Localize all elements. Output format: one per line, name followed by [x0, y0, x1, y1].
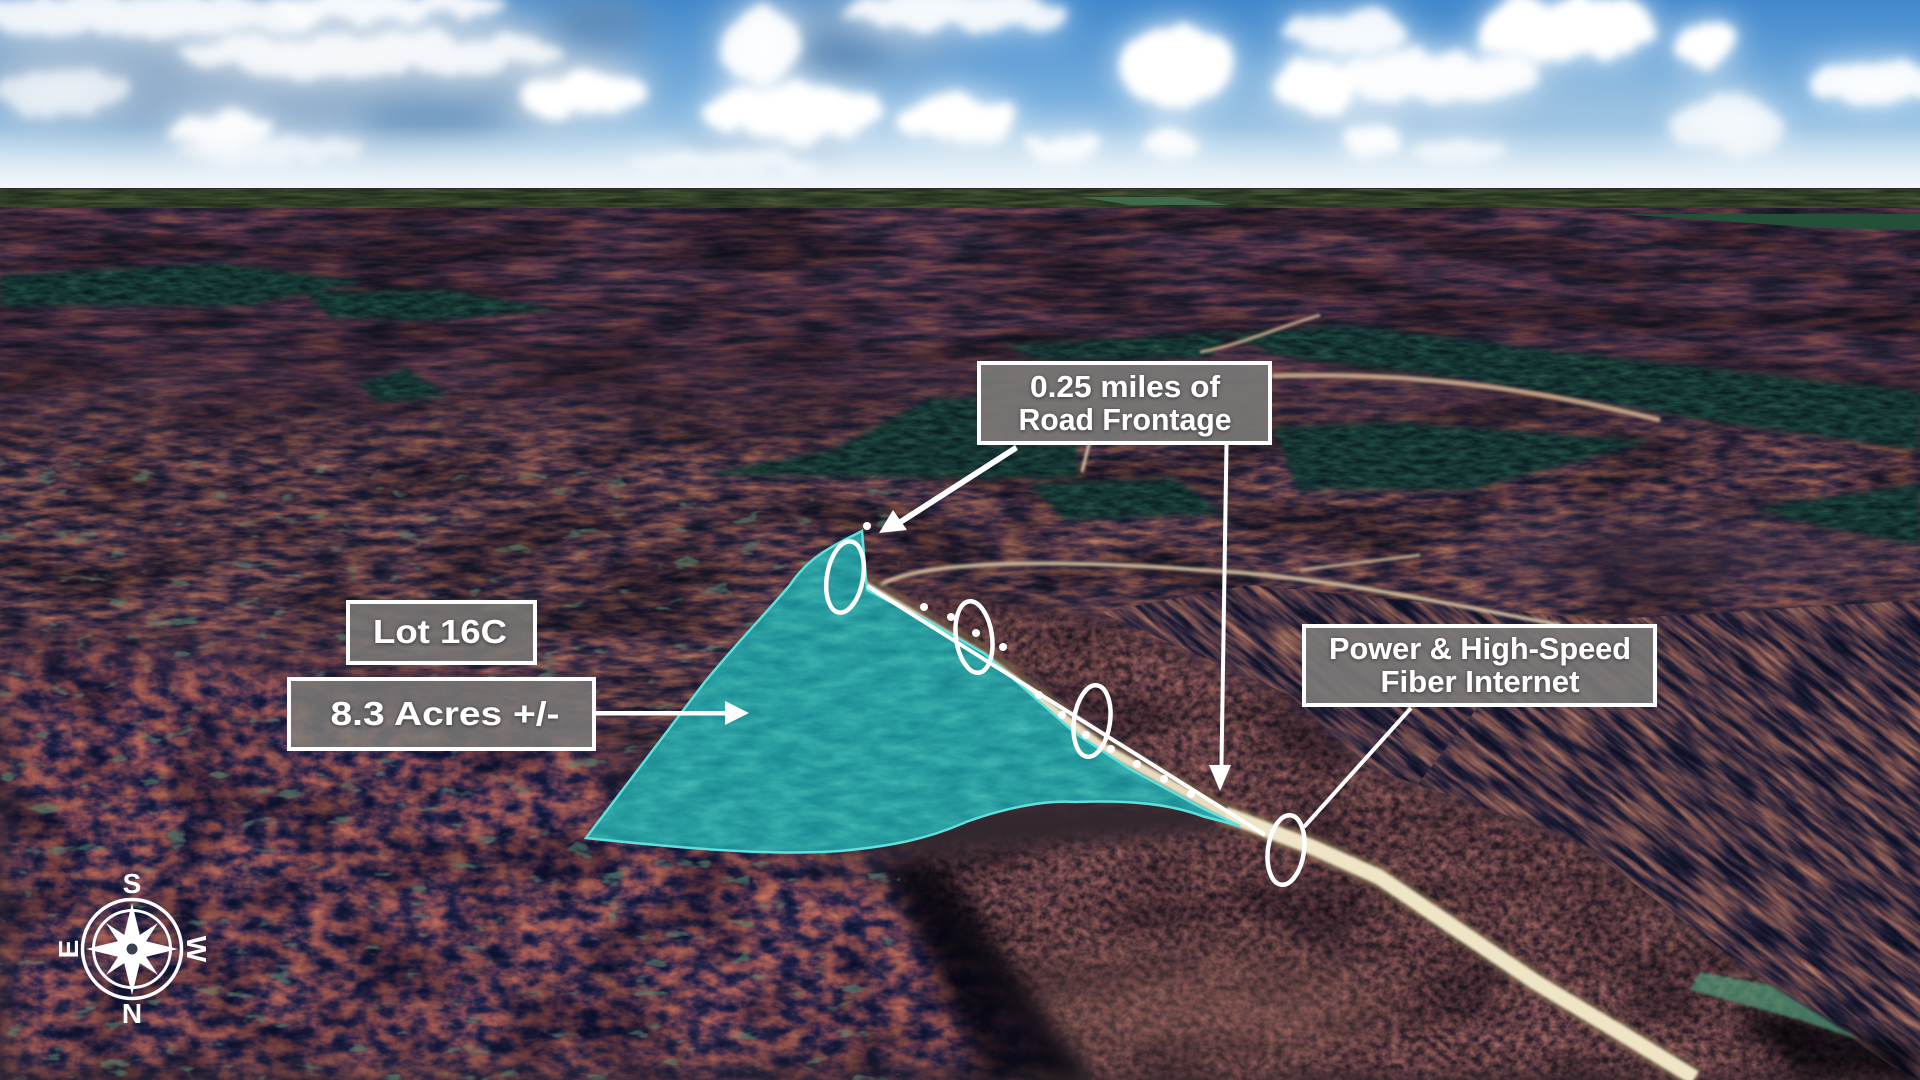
distant horizon tree line	[0, 189, 1920, 208]
power and fiber marker ellipses	[821, 538, 1309, 887]
icon: compass rose: W	[181, 936, 212, 963]
label: acreage	[289, 679, 594, 749]
dark green tree plantations	[0, 260, 1920, 560]
cloud shadows	[360, 0, 890, 157]
label: power and fiber: Power & High-Speed	[1329, 631, 1631, 666]
dirt roads	[863, 315, 1695, 1078]
label: power and fiber: Fiber Internet	[1380, 664, 1580, 699]
arrow: acreage to lot	[595, 701, 749, 725]
label: lot number: Lot 16C	[373, 613, 507, 650]
label: road frontage	[979, 363, 1270, 443]
label: road frontage: 0.25 miles of	[1030, 369, 1221, 404]
icon: compass rose: E	[53, 940, 84, 958]
label: power and fiber	[1304, 626, 1655, 705]
green foliage specks	[0, 460, 900, 1080]
arrow: road frontage to road	[1209, 445, 1231, 791]
icon: compass rose: S	[123, 868, 141, 899]
icon: compass rose: N	[122, 998, 142, 1029]
pointer line: power and fiber	[1304, 708, 1411, 827]
lot 16C teal parcel	[580, 525, 1260, 860]
background: sky with clouds	[0, 0, 1920, 195]
road frontage marker line and utility dots	[863, 522, 1265, 835]
label: lot number	[348, 602, 535, 663]
arrow: road frontage to lot top	[879, 445, 1018, 533]
grassy green clearing on the ridge	[1690, 972, 1860, 1040]
label: acreage: 8.3 Acres +/-	[330, 695, 560, 732]
icon: compass rose	[53, 868, 212, 1029]
label: road frontage: Road Frontage	[1018, 402, 1232, 437]
